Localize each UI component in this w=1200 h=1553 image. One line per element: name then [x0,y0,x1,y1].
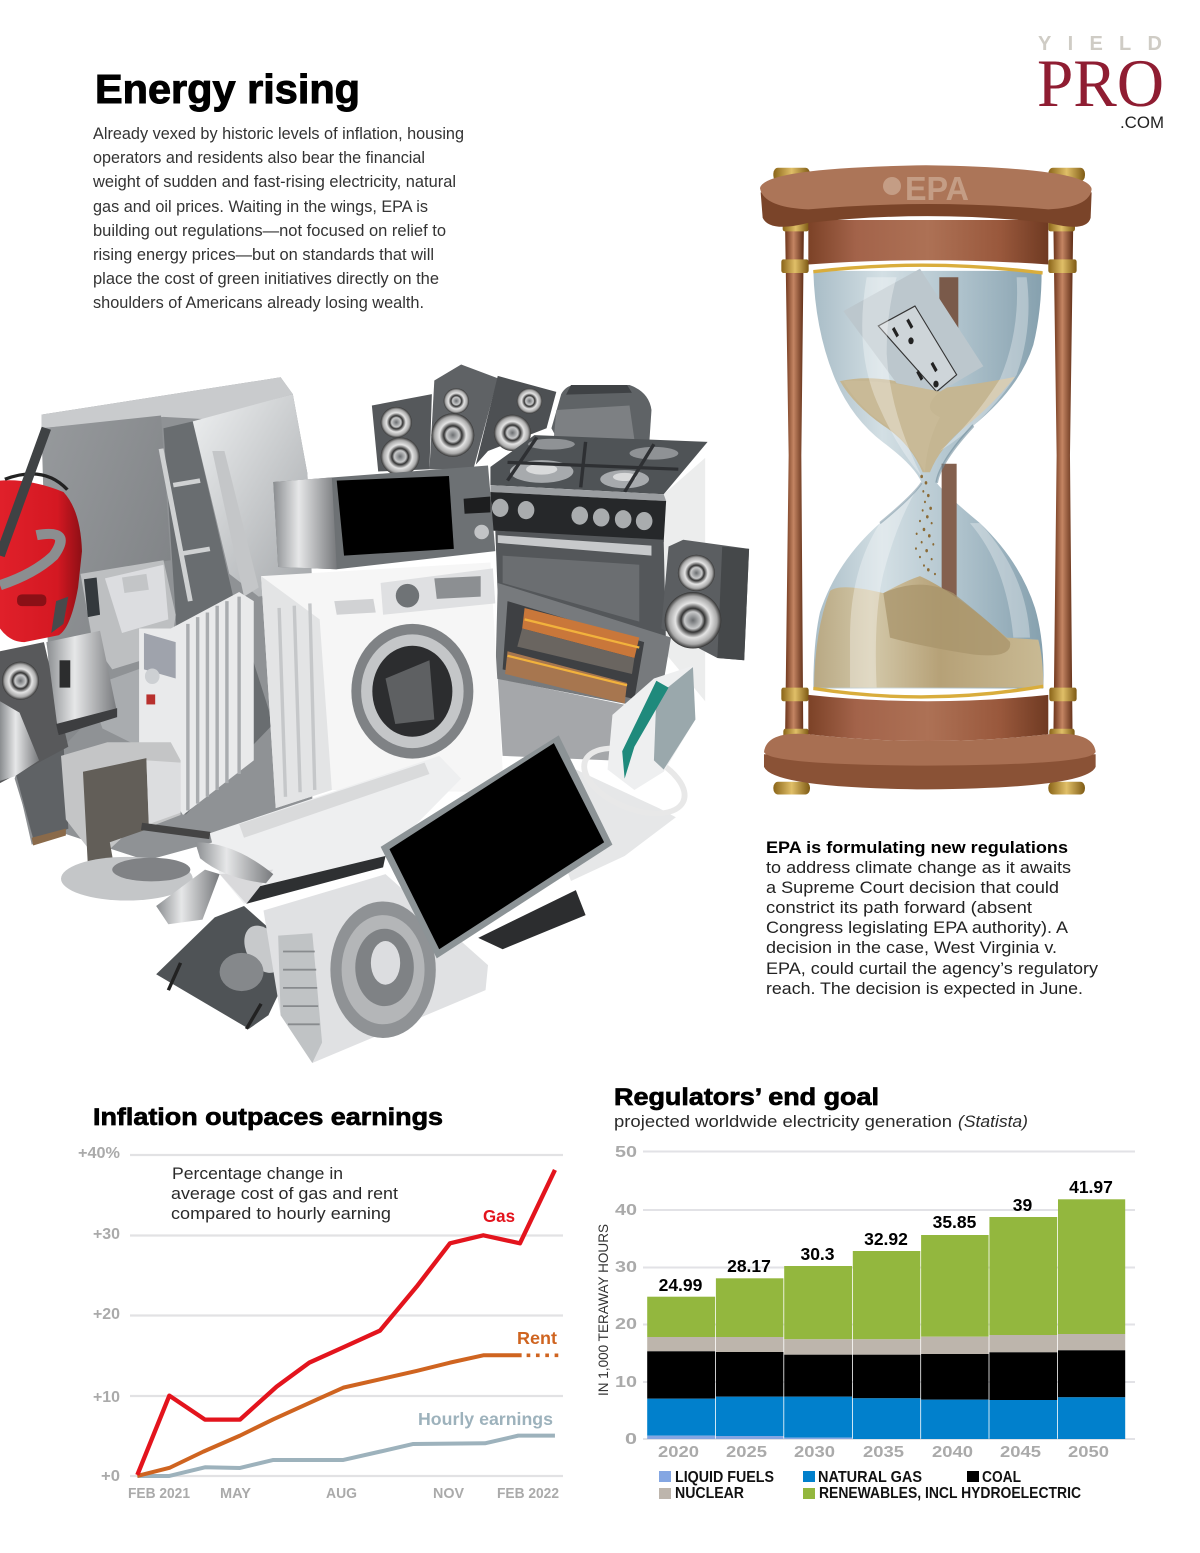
bar totals [659,1177,1113,1295]
bar totals: 35.85 [933,1212,977,1232]
x axis labels: 2020 [658,1444,699,1461]
y axis labels: +0 [101,1468,120,1485]
bottom sand [814,576,1043,688]
EPA caption text: constrict its path forward (absent [766,898,1032,917]
legend: NATURAL GAS [818,1469,922,1486]
intro text block: weight of sudden and fast-rising electricity, natural [92,172,456,191]
coffee machine [61,742,210,901]
EPA mark on hourglass: EPA [905,170,969,207]
bar 2050 [1058,1199,1125,1439]
bar 2040 [921,1235,989,1439]
x axis labels: 2030 [794,1444,835,1461]
intro text block: place the cost of green initiatives directly on the [93,269,439,288]
y axis labels: +10 [93,1389,120,1406]
intro text block: gas and oil prices. Waiting in the wings, EPA is [93,197,428,216]
chart subtitle: (Statista) [958,1112,1028,1131]
EPA caption text: to address climate change as it awaits [766,858,1071,877]
series labels [418,1206,557,1429]
series labels: Rent [517,1328,557,1348]
legend: LIQUID FUELS [675,1469,774,1486]
gas stove [490,435,708,701]
chart subtitle: projected worldwide electricity generation [614,1112,952,1131]
intro text block: shoulders of Americans already losing wealth. [93,293,424,312]
chart note: average cost of gas and rent [171,1184,398,1203]
microwave [273,466,495,569]
oil radiator [139,592,254,815]
bar totals: 30.3 [800,1244,835,1264]
flat-screen TV [381,735,612,958]
top wooden cap [760,165,1092,273]
panel: inflation line chart [78,1104,563,1502]
x axis labels: FEB 2022 [497,1485,559,1502]
line: hourly earnings [137,1436,555,1476]
y axis labels: 30 [615,1259,637,1276]
x axis labels: AUG [326,1485,357,1502]
logo: Yield Pro: PRO [1037,45,1164,121]
logo: Yield Pro: .COM [1120,113,1164,132]
intro text block: building out regulations—not focused on relief to [93,221,446,240]
stacked bars [647,1199,1125,1439]
bar 2035 [853,1251,920,1439]
outlet plate [843,269,983,392]
x axis labels: 2045 [1000,1444,1041,1461]
metal legs under heater [498,678,630,760]
legend: COAL [982,1469,1021,1486]
quartz heater [495,583,671,710]
intro text block: rising energy prices—but on standards that will [93,245,434,264]
chart note [171,1164,398,1223]
bar totals: 39 [1013,1195,1032,1215]
intro text block: operators and residents also bear the financial [93,148,425,167]
x axis labels: NOV [433,1485,464,1502]
y axis labels [615,1144,637,1448]
top sand front [843,381,940,472]
top sand [840,377,1015,472]
y axis labels: 50 [615,1144,637,1161]
title: Energy rising [95,66,360,112]
series labels: Gas [483,1206,515,1226]
EPA caption text: decision in the case, West Virginia v. [766,938,1057,957]
line: rent [137,1355,563,1476]
toaster [551,385,651,446]
chart note: compared to hourly earning [171,1204,391,1223]
y axis labels: 20 [615,1316,637,1333]
chart heading: Inflation outpaces earnings [93,1104,443,1131]
EPA caption text: Congress legislating EPA authority). A [766,918,1069,937]
x axis labels [658,1444,1109,1461]
bar 2025 [716,1278,783,1439]
logo: Yield Pro: YIELD [1038,33,1162,55]
glass highlights [850,277,1030,688]
illustration: wooden hourglass with EPA mark and outlet [760,165,1096,794]
inner rod [939,277,958,330]
stereo speaker, right [661,540,749,660]
x axis labels [128,1485,559,1502]
bar 2030 [784,1266,852,1439]
y axis labels: +30 [93,1226,120,1243]
intro text block: Already vexed by historic levels of inflation, housing [93,124,464,143]
outdoor AC unit [264,874,488,1063]
legend [659,1469,1081,1502]
y axis labels: 40 [615,1202,637,1219]
small kettle, left edge [0,701,39,781]
glass bulb [813,269,1044,688]
series labels: Hourly earnings [418,1409,553,1429]
kettle [46,631,117,735]
fridge [15,377,312,860]
panel: electricity generation stacked bars [595,1084,1135,1502]
y axis labels: +20 [93,1306,120,1323]
EPA caption text: reach. The decision is expected in June. [766,979,1083,998]
x axis labels: FEB 2021 [128,1485,190,1502]
intro text block [92,124,464,312]
illustration: pile of home appliances [0,365,749,1063]
white AC piece behind TV [547,770,676,881]
falling sand [915,475,936,575]
stereo speakers, top [372,365,556,476]
line: gas [137,1170,555,1475]
y axis labels: 0 [625,1431,637,1448]
y axis labels: 10 [615,1374,637,1391]
EPA caption text: EPA is formulating new regulations [766,838,1068,857]
washing machine [261,562,503,808]
bar 2020 [647,1297,715,1439]
y axis labels: +40% [78,1145,120,1162]
bar totals: 32.92 [864,1229,908,1249]
steam iron [573,666,695,827]
small speaker, left [0,642,68,783]
legend: RENEWABLES, INCL HYDROELECTRIC [819,1485,1081,1502]
bar totals: 24.99 [659,1275,703,1295]
legend: NUCLEAR [675,1485,744,1502]
chart heading: Regulators’ end goal [614,1084,879,1111]
chart note: Percentage change in [172,1164,343,1183]
EPA caption text: EPA, could curtail the agency’s regulatory [766,959,1099,978]
rear posts and caps [773,168,1085,794]
x axis labels: 2040 [932,1444,973,1461]
x axis labels: 2050 [1068,1444,1109,1461]
y axis title: IN 1,000 TERAWAY HOURS [595,1224,611,1396]
x axis labels: 2025 [726,1444,767,1461]
bar totals: 41.97 [1069,1177,1113,1197]
bar 2045 [989,1217,1057,1439]
EPA caption text: a Supreme Court decision that could [766,878,1059,897]
y axis labels [78,1145,120,1485]
x axis labels: MAY [220,1485,251,1502]
bottom wooden base [764,686,1096,789]
bar totals: 28.17 [727,1256,771,1276]
EPA caption text [766,838,1099,998]
red vacuum cleaner [0,428,82,642]
x axis labels: 2035 [863,1444,904,1461]
meat grinder [156,842,298,1029]
wall air conditioner [210,756,461,904]
